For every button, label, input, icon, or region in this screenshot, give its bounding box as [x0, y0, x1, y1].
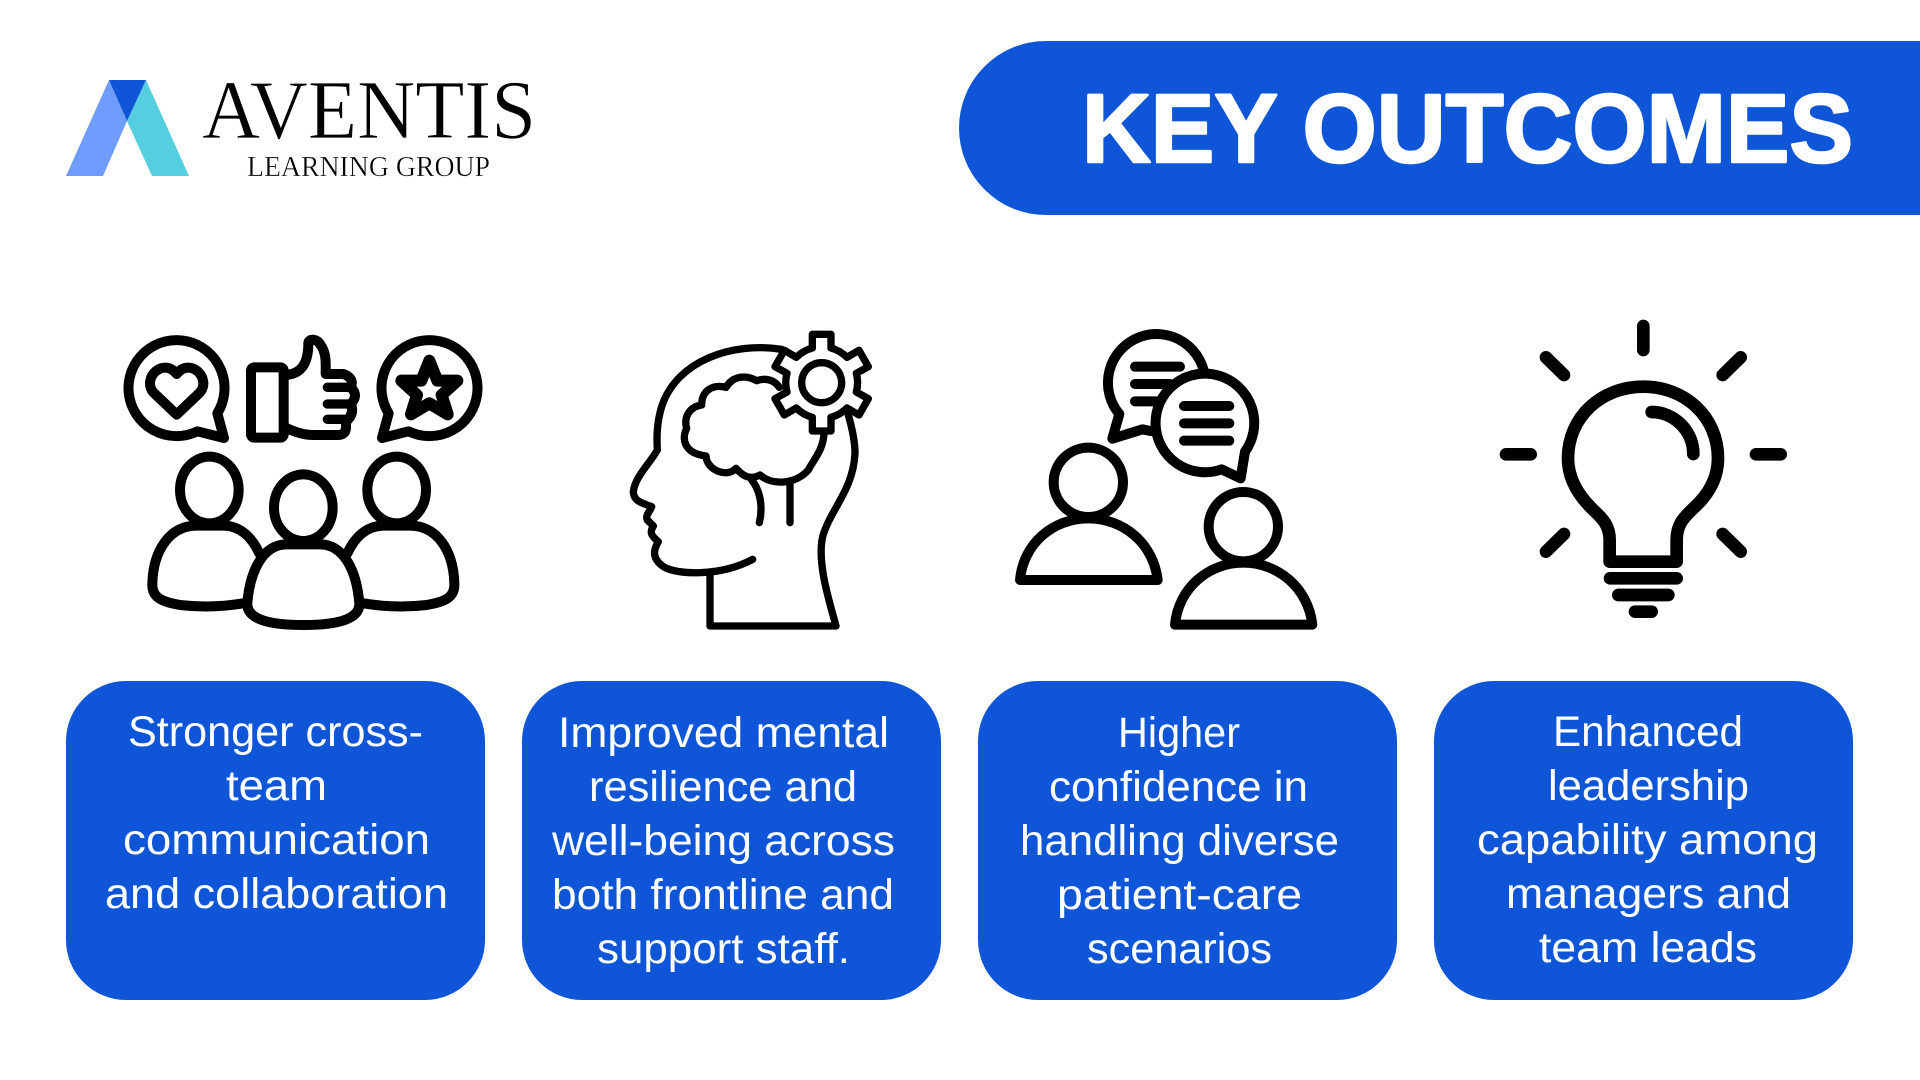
panel text: and collaboration	[105, 870, 448, 918]
panel: patient-care confidence	[978, 681, 1397, 1000]
heart bubble	[129, 340, 225, 438]
panel text: team	[226, 762, 327, 810]
left person	[1020, 448, 1158, 580]
panel text: leadership	[1548, 762, 1749, 810]
panel text	[1477, 708, 1818, 972]
panel text	[551, 709, 895, 973]
front speech bubble	[1156, 374, 1254, 478]
panel text: resilience and	[589, 763, 857, 811]
panel text: patient-care	[1057, 871, 1302, 919]
panel text: scenarios	[1087, 925, 1272, 973]
panel text: communication	[123, 816, 430, 864]
panel text: Improved mental	[558, 709, 889, 757]
icon: head with brain and gear	[633, 334, 868, 626]
panel text	[1020, 709, 1339, 973]
panel: leadership capability	[1434, 681, 1853, 1000]
icon: light bulb	[1506, 326, 1781, 612]
title banner	[959, 41, 1920, 215]
logo tagline: LEARNING GROUP	[247, 152, 490, 183]
head outline	[633, 348, 782, 573]
logo mark	[66, 80, 189, 176]
panel text: confidence in	[1049, 763, 1308, 811]
bulb highlight	[1652, 412, 1693, 454]
logo wordmark: AVENTIS	[202, 64, 536, 157]
panel text: capability among	[1477, 816, 1818, 864]
right person	[347, 457, 454, 606]
star bubble	[381, 340, 477, 438]
gear	[775, 334, 868, 431]
panel text: Stronger cross-	[128, 708, 423, 756]
panel text: Enhanced	[1553, 708, 1743, 756]
icon: two people in conversation	[1020, 334, 1312, 625]
panel text: support staff.	[597, 925, 850, 973]
panel text: handling diverse	[1020, 817, 1339, 865]
panel text: well-being across	[551, 817, 895, 865]
panel text: both frontline and	[552, 871, 894, 919]
panel: cross-team communication	[66, 681, 485, 1000]
panel text	[105, 708, 448, 918]
back speech bubble	[1108, 334, 1205, 439]
centre person	[247, 474, 359, 625]
brain	[684, 377, 824, 523]
bulb base	[1610, 578, 1677, 612]
bulb outline	[1568, 387, 1718, 562]
panel: mental resilience	[522, 681, 941, 1000]
thumbs up	[251, 340, 355, 438]
panel text: Higher	[1118, 709, 1240, 757]
left person	[152, 457, 259, 606]
icon: team with feedback bubbles	[129, 340, 477, 625]
title text: KEY OUTCOMES	[1082, 74, 1853, 183]
rays	[1506, 326, 1781, 552]
panel text: team leads	[1539, 924, 1757, 972]
right person	[1175, 492, 1312, 625]
neck and back of head	[710, 415, 855, 626]
panel text: managers and	[1506, 870, 1791, 918]
logo: Aventis Learning Group	[66, 64, 536, 183]
